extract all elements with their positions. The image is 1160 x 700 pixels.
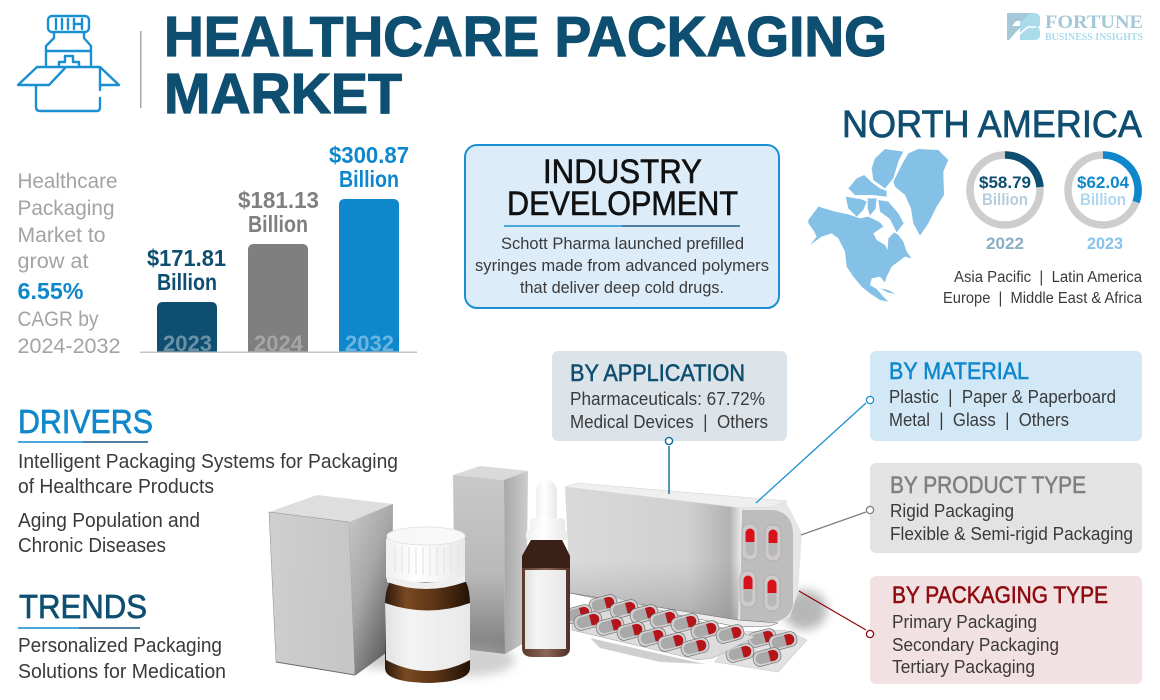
bar: 2024: $181.13 <box>238 187 319 213</box>
donut: 2022: 2022 <box>986 234 1024 253</box>
photo: amber jar <box>385 527 515 683</box>
bar: 2032: Billion <box>339 166 399 192</box>
bar: 2023: $171.81 <box>147 245 226 271</box>
title: HEALTHCARE PACKAGING <box>164 5 887 69</box>
panel: by packaging type: Primary Packaging <box>892 612 1037 632</box>
panel: industry development: DEVELOPMENT <box>507 185 738 223</box>
panel: industry development: syringes made from advanced polymers <box>475 256 769 275</box>
map: North America <box>808 149 948 302</box>
section: trends: Solutions for Medication <box>18 661 226 683</box>
panel: by packaging type <box>870 576 1142 684</box>
panel: by material: BY MATERIAL <box>889 358 1029 385</box>
text block: CAGR statement: 6.55% <box>18 278 84 304</box>
text block: CAGR statement: grow at <box>18 250 89 273</box>
icon: medicine bottle in box <box>18 16 119 111</box>
bar: 2032: $300.87 <box>329 142 409 168</box>
connector: application <box>665 437 673 494</box>
panel: by packaging type: BY PACKAGING TYPE <box>892 582 1108 609</box>
bar: 2023 <box>147 245 226 356</box>
section: drivers: Intelligent Packaging Systems for Packaging <box>18 451 398 473</box>
bar: 2032: 2032 <box>345 331 394 356</box>
section: drivers: of Healthcare Products <box>18 476 214 498</box>
donut: 2022: $58.79 <box>979 173 1031 192</box>
text block: CAGR statement: Packaging <box>18 197 114 220</box>
bar: 2023: 2023 <box>163 331 212 356</box>
logo: Fortune Business Insights: FORTUNE <box>1045 12 1143 33</box>
bar: 2032 <box>329 142 409 356</box>
bar: 2024 <box>238 187 319 356</box>
text block: CAGR statement: CAGR by <box>18 308 99 331</box>
panel: by product type: BY PRODUCT TYPE <box>890 472 1086 499</box>
divider: header <box>140 31 142 108</box>
section: drivers: Chronic Diseases <box>18 535 166 557</box>
panel: by material <box>870 351 1142 441</box>
panel: industry development: that deliver deep cold drugs. <box>520 278 724 297</box>
photo: medicine carton with blister <box>565 483 827 630</box>
bar: 2024: 2024 <box>254 331 304 356</box>
donut: 2022: Billion <box>982 190 1028 209</box>
donut: 2023 <box>1068 155 1138 253</box>
photo: blister packs <box>563 593 807 672</box>
photo: carton box large <box>269 495 445 675</box>
text block: other regions <box>943 269 1142 307</box>
section: trends: TRENDS <box>19 588 147 625</box>
photo: dropper bottle <box>522 480 570 657</box>
donut: 2022 <box>970 155 1040 253</box>
title <box>164 5 887 126</box>
panel: by packaging type: Secondary Packaging <box>892 635 1059 655</box>
panel: by application: Pharmaceuticals: 67.72% <box>570 389 765 409</box>
panel: by packaging type: Tertiary Packaging <box>892 657 1035 677</box>
connector: packaging type <box>799 591 874 638</box>
donut: 2023: $62.04 <box>1077 173 1130 192</box>
panel: by application: BY APPLICATION <box>570 360 745 387</box>
panel: by application: Medical Devices | Others <box>570 412 768 432</box>
section: drivers: Aging Population and <box>18 510 200 532</box>
panel: by material: Plastic | Paper & Paperboard <box>889 387 1116 407</box>
connector: material <box>756 396 874 503</box>
panel: by product type: Flexible & Semi-rigid Packaging <box>890 524 1133 544</box>
text block: CAGR statement <box>18 170 120 358</box>
panel: industry development: Schott Pharma launched prefilled <box>501 234 744 253</box>
section: trends <box>18 588 226 683</box>
connector: product type <box>801 506 874 535</box>
logo: Fortune Business Insights: BUSINESS INSIGHTS <box>1045 32 1143 43</box>
bar: 2024: Billion <box>248 211 308 237</box>
text block: other regions: Europe | Middle East & Africa <box>943 290 1142 307</box>
donut: 2023: 2023 <box>1087 234 1123 253</box>
text block: CAGR statement: Healthcare <box>18 170 118 193</box>
section: drivers: DRIVERS <box>18 403 153 440</box>
panel: by product type: Rigid Packaging <box>890 501 1014 521</box>
panel: by application <box>552 351 787 441</box>
bar: 2023: Billion <box>157 269 217 295</box>
logo: Fortune Business Insights <box>1007 12 1143 43</box>
panel: industry development: INDUSTRY <box>543 153 702 191</box>
panel: by product type <box>870 463 1142 553</box>
text block: CAGR statement: 2024-2032 <box>18 335 120 358</box>
text block: CAGR statement: Market to <box>18 224 106 247</box>
heading: North America: NORTH AMERICA <box>842 104 1143 146</box>
photo: carton box tall <box>453 466 528 654</box>
title: MARKET <box>164 62 402 126</box>
section: drivers <box>18 403 398 557</box>
section: trends: Personalized Packaging <box>18 635 222 657</box>
text block: other regions: Asia Pacific | Latin America <box>954 269 1142 286</box>
donut: 2023: Billion <box>1080 190 1126 209</box>
bar chart: market size <box>140 142 417 356</box>
panel: by material: Metal | Glass | Others <box>889 410 1069 430</box>
panel: industry development <box>465 145 779 308</box>
